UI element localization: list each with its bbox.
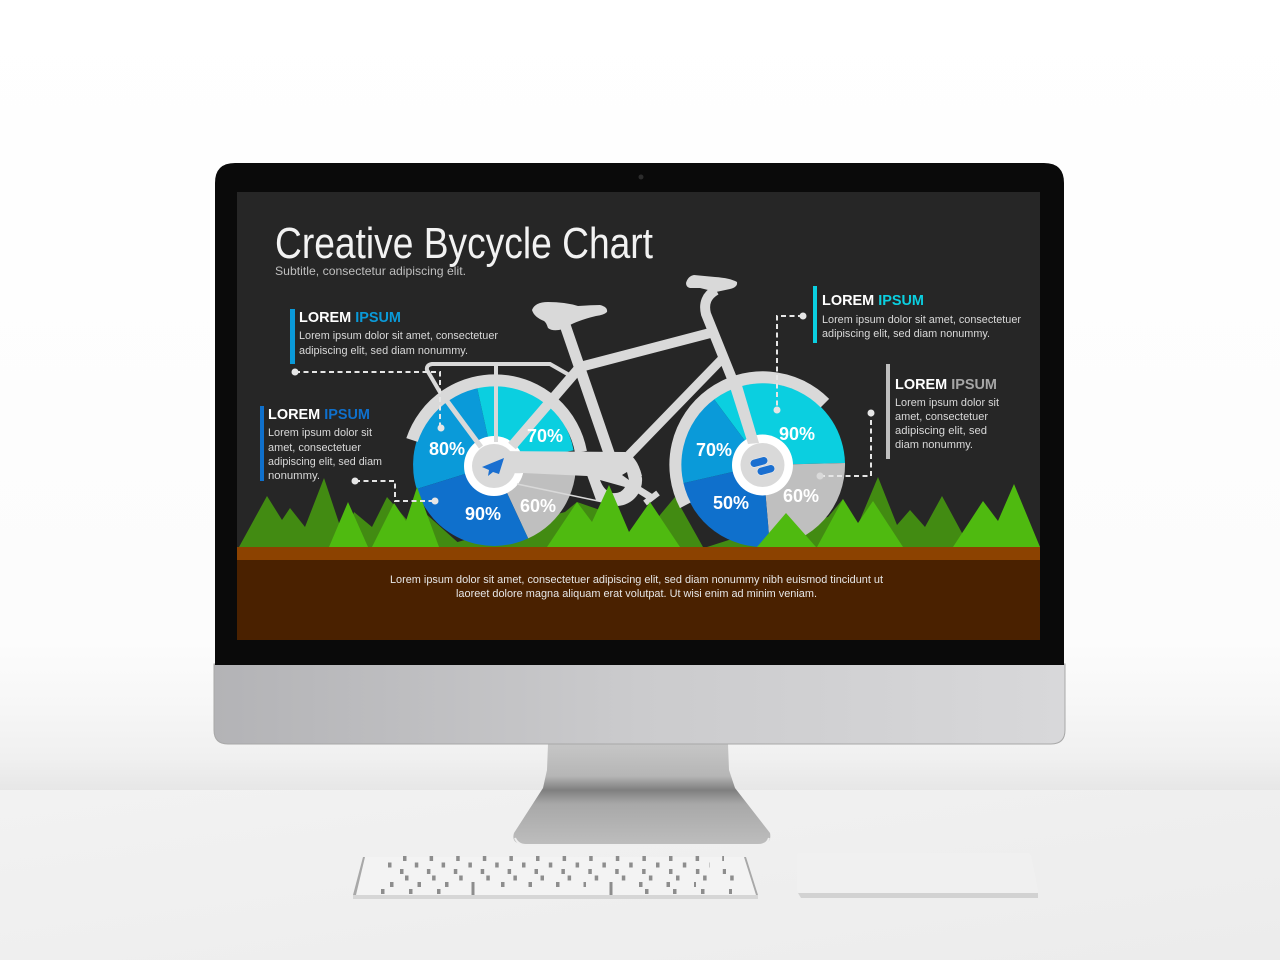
right wheel percent labels: 70% [696, 440, 732, 460]
callout: upper right [813, 286, 1021, 343]
trackpad [797, 853, 1038, 898]
left wheel percent labels: 60% [520, 496, 556, 516]
callout: lower left: LOREM IPSUM [268, 406, 370, 423]
left wheel percent labels [429, 426, 563, 524]
front trees: right cluster [757, 477, 1040, 547]
callout: upper right: Lorem ipsum dolor sit amet, consectetuer [822, 314, 1021, 326]
icon: binoculars [749, 456, 776, 476]
chainring cut-outs [600, 480, 625, 493]
monitor chin [214, 664, 1065, 744]
back trees behind wheels [440, 497, 860, 547]
callout: upper left: Lorem ipsum dolor sit amet, consectetuer [299, 330, 498, 342]
left wheel pie chart [413, 384, 576, 546]
monitor bezel [215, 163, 1064, 665]
subtitle: Subtitle, consectetur adipiscing elit. [275, 264, 466, 278]
connector: upper left callout [292, 368, 444, 432]
right wheel percent labels [696, 424, 819, 513]
handlebar [686, 275, 737, 292]
front trees: left cluster [239, 478, 463, 547]
callout: right: Lorem ipsum dolor sit [895, 397, 999, 409]
connector: lower left callout [352, 478, 438, 504]
saddle [532, 302, 607, 330]
ground strip [237, 547, 1040, 560]
footer text [390, 574, 883, 600]
callout: right: adipiscing elit, sed [895, 425, 987, 437]
frame tubes [427, 290, 735, 503]
keyboard [353, 857, 758, 899]
fork [729, 382, 759, 444]
soil panel [237, 560, 1040, 640]
screen slide [237, 192, 1040, 640]
left wheel percent labels: 70% [527, 426, 563, 446]
chainring [587, 470, 642, 506]
callout: lower left: amet, consectetuer [268, 442, 361, 454]
monitor stand [513, 744, 770, 845]
right wheel percent labels: 90% [779, 424, 815, 444]
right fender [675, 377, 825, 505]
footer text: Lorem ipsum dolor sit amet, consectetuer adipiscing elit, sed diam nonummy nibh euismod tincidunt ut [390, 574, 883, 586]
connector: upper right callout [774, 312, 806, 414]
callout: right: amet, consectetuer [895, 411, 988, 423]
callout: lower left: nonummy. [268, 470, 320, 482]
callout: upper left: adipiscing elit, sed diam nonummy. [299, 345, 468, 357]
callout: lower left [260, 406, 382, 482]
callout: lower left: adipiscing elit, sed diam [268, 456, 382, 468]
footer text: laoreet dolore magna aliquam erat volutpat. Ut wisi enim ad minim veniam. [456, 588, 817, 600]
connector: lower right callout [816, 410, 874, 480]
right wheel pie chart [681, 383, 845, 547]
callout: lower left: Lorem ipsum dolor sit [268, 427, 372, 439]
title: Creative Bycycle Chart [275, 219, 653, 268]
callout: upper left: LOREM IPSUM [299, 309, 401, 326]
webcam [638, 174, 644, 180]
callout: upper right: adipiscing elit, sed diam nonummy. [822, 328, 990, 340]
left fender [412, 380, 581, 452]
chain case [498, 451, 642, 476]
right wheel percent labels: 50% [713, 493, 749, 513]
left wheel percent labels: 80% [429, 439, 465, 459]
front trees: middle cluster [547, 485, 680, 547]
right wheel percent labels: 60% [783, 486, 819, 506]
bicycle silhouette [412, 275, 825, 506]
left wheel percent labels: 90% [465, 504, 501, 524]
callout: right: LOREM IPSUM [895, 376, 997, 393]
callout: right [886, 364, 999, 459]
icon: paper plane [482, 458, 504, 476]
callout: upper right: LOREM IPSUM [822, 292, 924, 309]
callout: right: diam nonummy. [895, 439, 973, 451]
callout: upper left [290, 309, 498, 364]
